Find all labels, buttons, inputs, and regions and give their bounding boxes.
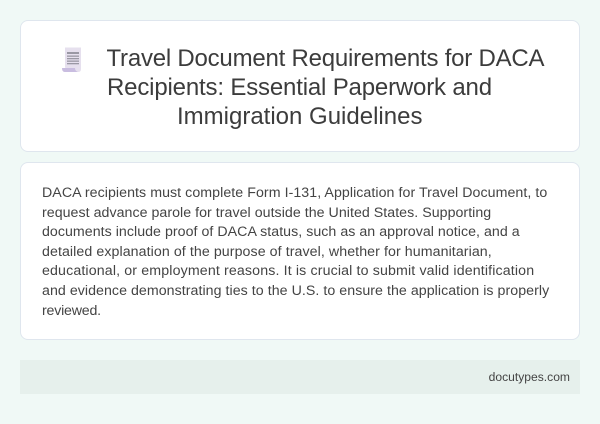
panel: description card (20, 162, 580, 340)
text block: description: and evidence demonstrating ties to the U.S. to ensure the application is properly (42, 283, 549, 299)
heading: title: Travel Document Requirements for DACA (106, 45, 544, 72)
heading: title: Recipients: Essential Paperwork and (107, 74, 492, 101)
footer bar (20, 360, 580, 394)
footer text: docutypes.com: docutypes.com (489, 370, 570, 384)
text block: description: educational, or employment reasons. It is crucial to submit valid identification (42, 263, 534, 279)
text block: description: request advance parole for travel outside the United States. Supporting (42, 205, 491, 221)
text block: description: documents include proof of DACA status, such as an approval notice, and a (42, 224, 520, 240)
text block: description: DACA recipients must complete Form I-131, Application for Travel Document, to (42, 185, 547, 201)
icon: document (62, 48, 81, 72)
panel: title card (20, 20, 580, 152)
text block: description: reviewed. (42, 303, 101, 319)
heading: title (106, 45, 544, 130)
text block: description: detailed explanation of the purpose of travel, whether for humanitarian, (42, 244, 492, 260)
text block: description (42, 185, 550, 319)
heading: title: Immigration Guidelines (177, 103, 422, 130)
